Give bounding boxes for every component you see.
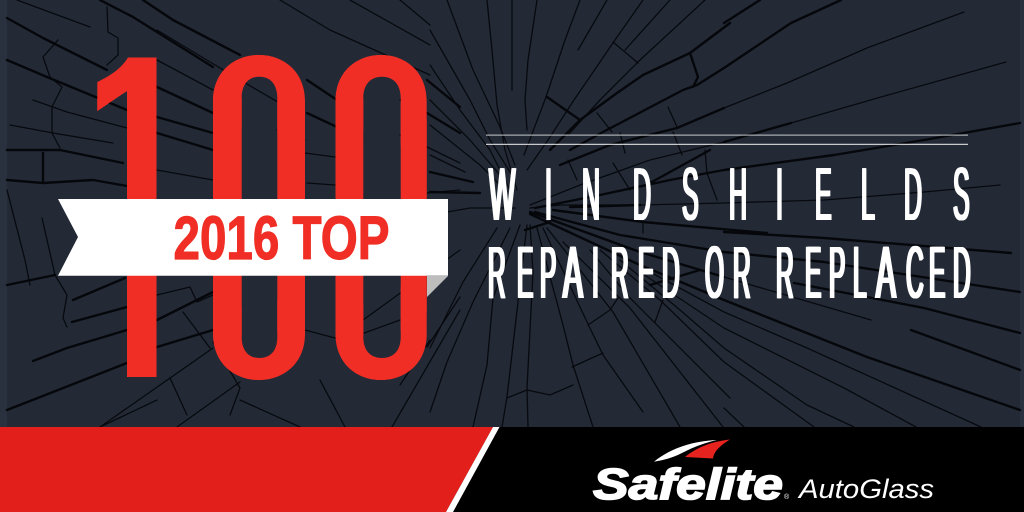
ribbon banner (58, 199, 448, 297)
headline: REPAIRED OR REPLACED: R (733, 230, 751, 314)
headline: REPAIRED OR REPLACED: A (563, 230, 583, 314)
headline: REPAIRED OR REPLACED: E (517, 230, 533, 314)
headline: REPAIRED OR REPLACED: I (592, 230, 599, 314)
ribbon label: 2016 TOP (174, 204, 390, 272)
registered mark: ® (784, 493, 790, 501)
headline: WINDSHIELDS: D (904, 152, 922, 236)
headline: REPAIRED OR REPLACED: A (876, 230, 896, 314)
headline: WINDSHIELDS: W (489, 152, 515, 236)
headline: WINDSHIELDS: E (815, 152, 832, 236)
double rule above headline (486, 135, 968, 145)
headline: WINDSHIELDS: N (582, 152, 600, 236)
headline: WINDSHIELDS: S (953, 152, 970, 236)
headline: REPAIRED OR REPLACED: P (540, 230, 556, 314)
icon: logo swoosh (654, 440, 730, 462)
headline: WINDSHIELDS: S (682, 152, 699, 236)
footer band (0, 427, 1024, 512)
headline: WINDSHIELDS (488, 152, 970, 236)
headline: REPAIRED OR REPLACED: R (488, 230, 506, 314)
headline: REPAIRED OR REPLACED (488, 230, 971, 314)
ribbon body (58, 199, 448, 276)
headline: REPAIRED OR REPLACED: C (906, 230, 924, 314)
headline: REPAIRED OR REPLACED: E (805, 230, 821, 314)
headline: REPAIRED OR REPLACED: R (776, 230, 794, 314)
product name: AutoGlass (797, 474, 934, 504)
headline: WINDSHIELDS: I (776, 152, 783, 236)
headline: WINDSHIELDS: D (633, 152, 651, 236)
headline: REPAIRED OR REPLACED: L (853, 230, 867, 314)
wordmark: Safelite (593, 460, 783, 509)
headline: WINDSHIELDS: I (545, 152, 552, 236)
headline: WINDSHIELDS: H (729, 152, 747, 236)
headline: REPAIRED OR REPLACED: P (829, 230, 845, 314)
headline: REPAIRED OR REPLACED: E (929, 230, 945, 314)
headline: REPAIRED OR REPLACED: D (953, 230, 971, 314)
headline: REPAIRED OR REPLACED: D (662, 230, 680, 314)
headline: REPAIRED OR REPLACED: E (638, 230, 654, 314)
ribbon fold (427, 276, 448, 297)
headline: REPAIRED OR REPLACED: O (705, 230, 724, 314)
Safelite AutoGlass logo (593, 440, 934, 509)
headline: WINDSHIELDS: L (861, 152, 875, 236)
headline: REPAIRED OR REPLACED: R (611, 230, 629, 314)
